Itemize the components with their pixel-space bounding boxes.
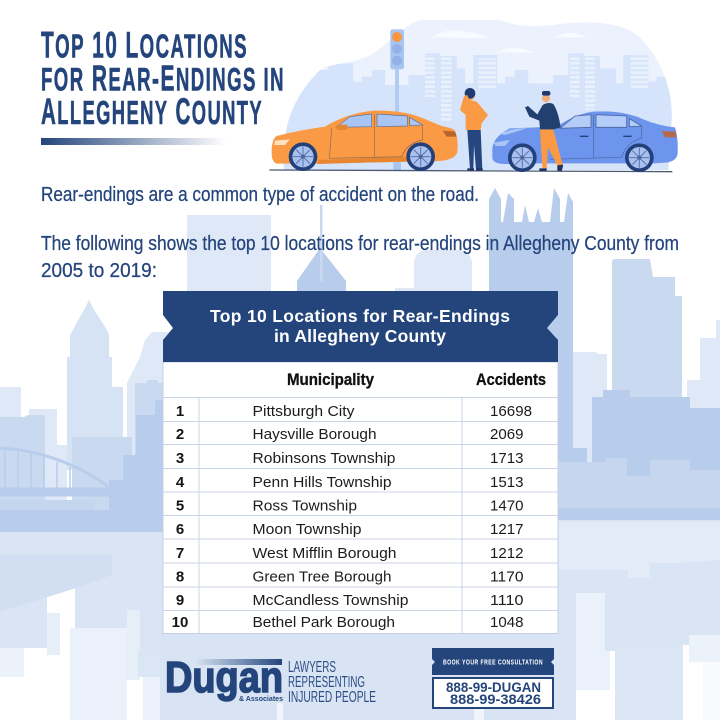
- row 3: Robinsons Township: [252, 451, 396, 467]
- person in orange shirt: [460, 88, 488, 171]
- consultation call to action: [432, 648, 554, 708]
- consultation call to action: 888-99-DUGAN: [446, 680, 541, 695]
- row 7: West Mifflin Borough: [252, 546, 396, 562]
- city backdrop blob: [277, 20, 677, 173]
- row 7: 7: [176, 545, 184, 562]
- tagline: LAWYERS: [288, 659, 336, 676]
- row 10: 10: [172, 614, 188, 631]
- title underline gradient bar: [41, 138, 226, 145]
- skyline: far buildings: [0, 215, 720, 532]
- row 1: 16698: [490, 404, 532, 420]
- row 9: McCandless Township: [252, 593, 408, 609]
- row 8: Green Tree Borough: [252, 570, 392, 586]
- person in navy sweater: [525, 91, 563, 171]
- row 6: [176, 521, 524, 538]
- skyline: mid buildings: [0, 259, 682, 510]
- row 2: [176, 426, 524, 443]
- table column headers: Accidents: [476, 371, 546, 389]
- row 4: 4: [176, 474, 185, 491]
- row 1: [176, 403, 532, 420]
- row 1: Pittsburgh City: [252, 404, 355, 420]
- consultation call to action: BOOK YOUR FREE CONSULTATION: [443, 660, 543, 666]
- row 1: 1: [176, 403, 184, 420]
- row 8: [176, 568, 524, 586]
- row 3: 1713: [490, 451, 524, 467]
- row 7: [176, 545, 524, 562]
- row 7: 1212: [490, 546, 524, 562]
- row 8: 1170: [490, 570, 524, 586]
- row 10: [172, 614, 524, 631]
- trees band: [557, 458, 720, 508]
- consultation call to action: 888-99-38426: [450, 692, 542, 707]
- ground line: [269, 170, 672, 172]
- logo: Dugan & Associates: Dugan: [165, 653, 283, 702]
- intro text: [41, 184, 679, 282]
- row 9: 9: [176, 592, 184, 609]
- row 5: 1470: [490, 498, 524, 514]
- row 10: Bethel Park Borough: [252, 615, 395, 631]
- row 2: Haysville Borough: [252, 427, 376, 443]
- row 8: 8: [176, 568, 184, 586]
- tagline: INJURED PEOPLE: [288, 689, 376, 706]
- row 9: 1110: [490, 593, 524, 609]
- intro text: Rear-endings are a common type of accident on the road.: [41, 184, 479, 206]
- orange car: [272, 111, 458, 171]
- table column headers: Municipality: [287, 371, 375, 389]
- blue car: [492, 111, 678, 172]
- table column headers: [287, 371, 546, 389]
- row 4: 1513: [490, 475, 524, 491]
- title: FOR REAR-ENDINGS IN: [41, 58, 285, 98]
- tagline: REPRESENTING: [288, 674, 365, 691]
- title: [41, 24, 285, 132]
- row 6: 1217: [490, 522, 524, 538]
- logo: Dugan & Associates: & Associates: [239, 694, 283, 703]
- row 2: 2: [176, 426, 184, 443]
- row 2: 2069: [490, 427, 524, 443]
- river reflection: [0, 520, 720, 720]
- row 3: [176, 450, 524, 467]
- traffic light: [390, 29, 404, 171]
- row 6: 6: [176, 521, 184, 538]
- row 9: [176, 592, 524, 609]
- tagline: [288, 659, 376, 706]
- bridge: [0, 448, 116, 510]
- row 4: [176, 474, 524, 491]
- skyline: near buildings: [0, 188, 720, 532]
- hero illustration: car accident scene: [269, 20, 678, 173]
- title: ALLEGHENY COUNTY: [41, 91, 263, 132]
- row 5: 5: [176, 498, 184, 514]
- row 6: Moon Township: [252, 522, 362, 538]
- background: Pittsburgh skyline with river reflection: [0, 188, 720, 720]
- row 4: Penn Hills Township: [252, 475, 392, 491]
- table banner: in Allegheny County: [274, 326, 446, 346]
- row 5: Ross Township: [252, 498, 357, 514]
- intro text: 2005 to 2019:: [41, 260, 157, 282]
- row 5: [176, 498, 524, 514]
- table banner: Top 10 Locations for Rear-Endings: [210, 306, 510, 326]
- row 3: 3: [176, 450, 184, 467]
- table panel: [163, 291, 558, 634]
- title: TOP 10 LOCATIONS: [41, 24, 248, 66]
- row 10: 1048: [490, 615, 524, 631]
- table body: [163, 362, 558, 634]
- table banner: [163, 291, 558, 362]
